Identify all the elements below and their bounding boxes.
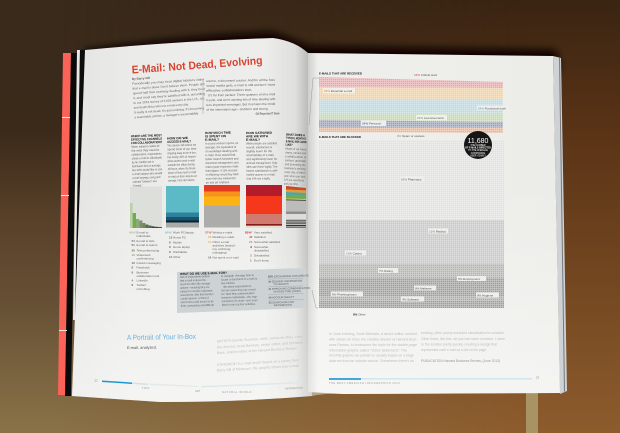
- band: personal: [319, 120, 503, 128]
- legend: satisfaction: 83%*: [245, 230, 253, 234]
- legend: time spent: Not spent on e-mail: [212, 255, 239, 259]
- column: satisfaction: 38% rate these highly. The: [246, 165, 278, 169]
- credits: [217, 335, 304, 372]
- legend: satisfaction: 4: [250, 245, 252, 249]
- intro text, column 1: and South Africa who use e-mail every day.: [134, 102, 189, 110]
- band: replica and casino: [319, 220, 504, 264]
- legend: access device: Mobile: [173, 240, 182, 244]
- column: monthly mix: and, when you look: [284, 174, 306, 179]
- legend: time spent: Reading e-mails: [212, 235, 235, 239]
- bracket lines: [309, 78, 319, 308]
- column: monthly mix: 22% are superfluous: [284, 178, 305, 183]
- column: time spent on e-mail: e-mail. How would that: [205, 153, 236, 157]
- column: effective channels: the most they used for: [131, 148, 160, 153]
- legend: collaboration channels: 69%*: [129, 230, 137, 234]
- column: monthly mix: every day, of which: [284, 170, 306, 175]
- column: monthly mix: business's sending: [284, 166, 306, 171]
- callout text, column 1: time consuming and difficult: [181, 303, 214, 308]
- legend: satisfaction: 1: [250, 258, 252, 262]
- legend: satisfaction: 43: [249, 235, 253, 239]
- left page footer bar: 22: [94, 378, 98, 382]
- legend: access device: 8: [169, 250, 171, 254]
- legend: access device: Home laptop: [173, 245, 190, 249]
- intro text, column 2: social media gets, e-mail is still workers' most: [206, 83, 275, 88]
- callout circle: 11,680: USER YEARLY: [470, 154, 486, 157]
- column: satisfaction: mobile access to e-mail.: [246, 172, 276, 177]
- intro text, column 1: it, and most say they're satisfied with it, according: [133, 92, 205, 100]
- intro text, column 2: It's far from perfect: Three-quarters of all e-mail: [208, 92, 276, 97]
- legend: access device: 8: [169, 245, 171, 249]
- article text, column 1: ness Review, to brainstorm the topic for the double-page: [329, 343, 417, 347]
- callout text, column 1: using it to archive important: [180, 288, 213, 293]
- column: how we access e-mail: outside the office during: [168, 162, 195, 167]
- legend: collaboration channels: Video/web: [136, 253, 151, 257]
- callout text, column 2: listed in the top four activities.: [222, 302, 256, 307]
- legend: time spent: [205, 230, 239, 259]
- legend: collaboration channels: LinkedIn: [136, 278, 148, 282]
- callout text, column 2: [221, 273, 258, 307]
- callout circle: 11,680: 11,680: [468, 138, 489, 145]
- legend: time spent: 14: [208, 255, 212, 259]
- blocked labels: 8% Hygiene: [477, 293, 494, 297]
- column: how we access e-mail: ACCESS E-MAIL?: [167, 139, 191, 144]
- legend: collaboration channels: individuals: [136, 234, 151, 238]
- column: satisfaction: archival management. Only: [246, 161, 278, 165]
- column: time spent on e-mail: more than two workweeks: [206, 176, 236, 181]
- legend: time spent: ing, archiving,: [212, 247, 231, 251]
- column: effective channels: by far. Mobile use is: [132, 160, 154, 164]
- article text, column 2: represented each e-mail as a dot on the page.: [421, 348, 487, 352]
- article text, column 2: PUBLICATION Harvard Business Review, (June 2013): [421, 359, 500, 363]
- column: how we access e-mail: The device still where we: [167, 143, 197, 147]
- column: time spent on e-mail: average, the equivalent of: [205, 145, 236, 149]
- received labels: 28% Essential e-mail: [324, 89, 352, 93]
- callout text, column 1: need for other file storage: [180, 281, 211, 286]
- legend: collaboration channels: Business: [136, 270, 149, 274]
- column: monthly mix: WHAT DOES A: [286, 133, 306, 137]
- column: effective channels: e-mail subject who would: [132, 171, 163, 176]
- legend: satisfaction: Very satisfied: [254, 230, 272, 234]
- blocked labels: [331, 176, 499, 316]
- callout text, column 2: between individuals—the origi-: [222, 295, 258, 300]
- received labels: 16% Personal: [362, 122, 381, 126]
- callout list of uses: 41 IMPROVING COMMUNICATION: [268, 286, 310, 291]
- column: time spent on e-mail: macro good responses make: [206, 164, 239, 169]
- callout circle: 11,680: [464, 131, 492, 159]
- right page: [308, 53, 560, 394]
- column: time spent on e-mail: E-MAIL?: [205, 138, 219, 142]
- column: effective channels: but 30% would like to use: [132, 167, 163, 172]
- credits: Barry Gill of Mimecast, this graphic shows how e-mail: [217, 364, 299, 372]
- column: satisfaction: E-MAIL?: [246, 138, 260, 142]
- intro text, column 2: source, a document courier. And for all the fuss: [206, 78, 276, 83]
- callout text, column 2: for. Note that communication: [221, 291, 255, 296]
- dot chart: blocked e-mails: [319, 140, 504, 308]
- legend: collaboration channels: 8: [132, 270, 134, 274]
- column: effective channels: WHICH ARE THE MOST: [131, 133, 162, 138]
- legend: collaboration channels: 51: [132, 243, 135, 247]
- callout text, column 1: documents. Still, this function: [180, 292, 214, 297]
- callout list of uses: 33 SEARCHING FOR: [269, 300, 294, 304]
- column: monthly mix: [284, 133, 308, 186]
- credits: Borie, articles editor, at the Harvard Business Review: [217, 346, 297, 355]
- blocked labels: 7% Dating: [379, 269, 393, 273]
- intro text, column 1: to our 2013 survey of 2,602 workers in the U.S., UK,: [133, 96, 206, 105]
- page shadow: [84, 32, 560, 70]
- credits: ARTISTS Bonnie Scranton, artist; James de Vries, crea-: [217, 335, 304, 343]
- column: satisfaction: While people are satisfied: [246, 141, 277, 145]
- article text, column 1: with James de Vries, the creative director at Harvard Busi-: [329, 338, 417, 342]
- legend: satisfaction: Somewhat: [254, 245, 268, 249]
- left page: [72, 38, 312, 402]
- column: how we access e-mail: dents access work e-mail: [168, 158, 195, 163]
- column: effective channels: selected "followers" and: [132, 179, 157, 184]
- credits: tive director; Scott Berinato, senior editor; and Christine: [217, 341, 303, 349]
- callout text, column 2: two minutes.: [221, 281, 235, 285]
- legend: satisfaction: 23: [249, 240, 253, 244]
- legend: satisfaction: [245, 230, 280, 262]
- legend: time spent: 15: [208, 240, 212, 244]
- callout text, column 2: list use cases they use e-mail: [221, 287, 256, 292]
- callout list of uses: TO GROUPS: [273, 282, 289, 286]
- section title: a portrait of your in-box: A Portrait of Your In-Box: [127, 332, 196, 342]
- intro text, column 1: By Barry Gill: [132, 76, 150, 81]
- left page footer bar: TWO: [142, 386, 150, 390]
- legend: collaboration channels: collaboration tool: [136, 274, 160, 278]
- intro text, column 1: [132, 72, 207, 119]
- blocked labels: 63% Pharmacy: [401, 177, 422, 181]
- legend: access device: Home PC: [173, 236, 187, 240]
- band: low-level work: [319, 114, 503, 122]
- blocked labels: 13% Replica: [429, 229, 446, 233]
- legend: time spent: 15: [208, 235, 212, 239]
- callout text, column 1: could improve: a third of: [181, 296, 209, 301]
- legend: time spent: managing): [212, 251, 227, 255]
- column: time spent on e-mail: that happen. A 10% increase: [206, 168, 238, 173]
- article text, column 2: Other times, like this, we just had some numbers. I came: [421, 337, 505, 341]
- band: spam or useless: [319, 128, 503, 133]
- intro text, column 1: that e-mail is dead. Don't believe them. People still: [132, 82, 205, 91]
- book cover edge strips: [58, 50, 85, 396]
- column: effective channels: FOR COLLABORATION?: [131, 140, 162, 145]
- title: E-Mail: Not Dead, Evolving: [131, 55, 263, 76]
- column: how we access e-mail: off-hours, where the break-: [168, 166, 196, 171]
- intro text, column 1: spend half their workday dealing with it, they trust: [133, 87, 205, 95]
- column: satisfaction: overall, satisfaction is: [246, 145, 273, 149]
- column: effective channels: collaboration, respondents: [132, 152, 162, 157]
- column: time spent on e-mail: document management, and: [205, 160, 239, 165]
- column: time spent on e-mail: [205, 130, 239, 184]
- chart: satisfaction stack: [246, 185, 282, 228]
- callout text, column 2: locate a document in e-mail is: [221, 277, 258, 282]
- intro text, column 2: of the information age—stubborn and strong.: [206, 107, 269, 112]
- column: effective channels: chose e-mail to individuals: [132, 155, 162, 160]
- column: how we access e-mail: spend most of our time: [167, 147, 197, 151]
- column: effective channels: e-mail anyway, using and: [132, 175, 161, 180]
- legend: collaboration channels: Facebook: [136, 266, 150, 270]
- page stack at right edge: [553, 56, 567, 394]
- column: monthly mix: and just 30%: [284, 182, 298, 186]
- legend: collaboration channels: Teleconferencing: [136, 248, 160, 252]
- callout circle: 11,680: OF E-MAILS DIRECTED: [465, 147, 491, 150]
- legend: access device: [165, 230, 194, 259]
- callout text, column 1: Half of respondents believe: [180, 274, 210, 279]
- received labels: 18% Critical work: [414, 73, 438, 77]
- legend: satisfaction: 3: [250, 254, 252, 258]
- right page footer bar: 23: [536, 376, 540, 380]
- column: time spent on e-mail: IS SPENT ON: [205, 134, 227, 138]
- legend: satisfaction: Dissatisfied: [254, 254, 270, 258]
- callout circle: 11,680: CORPORATE: [471, 152, 486, 155]
- legend: collaboration channels: 30: [132, 248, 135, 252]
- legend: time spent: activities (search-: [212, 243, 236, 247]
- callout list of uses: 40 ACCOUNTABILITY: [268, 295, 295, 299]
- legend: satisfaction: Satisfied: [254, 235, 266, 239]
- legend: time spent: Writing e-mails: [212, 230, 233, 234]
- legend: collaboration channels: E-mail to: [136, 230, 149, 234]
- heading: e-mails that are received: E-MAILS THAT ARE RECEIVED: [319, 72, 363, 76]
- callout text, column 2: nal intent of e-mail—isn't even: [222, 298, 258, 303]
- band: dating, employment and malware: [319, 264, 504, 278]
- legend: collaboration channels: 13: [132, 253, 135, 257]
- column: satisfaction: HOW SATISFIED: [246, 131, 273, 135]
- legend: collaboration channels: 8: [132, 266, 134, 270]
- callout text, column 2: We asked respondents to: [223, 284, 252, 289]
- column: how we access e-mail: chipping away at the in-box,: [167, 150, 197, 155]
- blocked labels: 11% Casino: [346, 251, 362, 255]
- left page footer bar: INFORMATION: [285, 386, 303, 390]
- column: satisfaction: [246, 131, 278, 181]
- intro text, column 2: [206, 78, 280, 117]
- left page footer bar: NATURAL WORLD: [222, 390, 252, 394]
- column: monthly mix: E-MAIL MIX LOOK: [286, 139, 307, 144]
- right page footer bar: [329, 376, 540, 385]
- legend: access device: Work PC/laptop: [173, 230, 194, 234]
- intro text, column 2: Gill Reported IT Desk: [256, 111, 280, 116]
- column: effective channels: EFFECTIVE CHANNELS: [131, 137, 162, 142]
- right page footer bar: THE BEST AMERICAN INFOGRAPHICS 2014: [329, 382, 400, 385]
- legend: collaboration channels: 4: [132, 278, 134, 282]
- section subtitle: E-mail, analyzed.: [127, 345, 157, 350]
- column: effective channels: "friends.": [133, 183, 143, 188]
- callout circle: 11,680: TO THE AVERAGE: [468, 149, 488, 152]
- column: time spent on e-mail: per year per employee.: [206, 180, 230, 184]
- chart: monthly mix stack: [286, 186, 306, 228]
- chart: collaboration channels bars: [130, 186, 162, 228]
- received labels: 24% Functional work: [478, 106, 506, 110]
- chart: time spent stack: [204, 185, 240, 228]
- column: effective channels: [131, 133, 164, 188]
- legend: access device: 60%*: [165, 230, 173, 234]
- column: how we access e-mail: [167, 136, 198, 183]
- callout text, column 1: [180, 274, 214, 308]
- column: monthly mix: content, generally: [285, 158, 306, 163]
- legend: time spent: 57%*: [205, 230, 213, 234]
- column: time spent on e-mail: In a year workers spend, on: [205, 141, 239, 145]
- column: how we access e-mail: is read on their access on: [168, 174, 197, 179]
- blocked labels: 6% Employment: [458, 277, 480, 281]
- legend: access device: iPad/tablet: [173, 250, 187, 254]
- band: functional work: [319, 100, 503, 114]
- column: effective channels: distribution lists on average,: [132, 163, 161, 168]
- article text, column 1: [329, 332, 417, 363]
- legend: collaboration channels: Instant messaging: [136, 261, 161, 265]
- callout list of uses: 56% EXCHANGING DOCUMENTS: [268, 273, 309, 278]
- callout list of uses: [268, 273, 310, 307]
- band: essential e-mail: [319, 87, 503, 100]
- article text, column 1: information graphic called "Vision Statement." The: [329, 348, 407, 352]
- intro text, column 2: effective collaboration tool.: [206, 88, 252, 93]
- received labels: 10% Low-level work: [417, 116, 444, 120]
- callout: what do we use e-mail for: [177, 268, 310, 313]
- column: monthly mix: many, varied and: [285, 150, 307, 155]
- column: monthly mix: a small portion of: [285, 154, 306, 159]
- legend: time spent: Other e-mail: [212, 240, 229, 244]
- column: satisfaction: searchability of e-mail,: [246, 153, 274, 157]
- intro text, column 1: It really is not dead; it's just evolving. It's becoming: [134, 106, 204, 115]
- callout text, column 2: to navigate. Average time to: [221, 273, 254, 278]
- legend: collaboration channels: 54: [132, 239, 135, 243]
- blocked labels: 8% Phishing/scam: [332, 292, 357, 296]
- legend: access device: 13: [169, 236, 173, 240]
- chart: access device stack: [166, 186, 199, 228]
- column: satisfaction: lowest satisfaction is with: [246, 169, 278, 173]
- legend: collaboration channels: microblog: [136, 287, 150, 291]
- callout text, column 1: users find e-mail search to be: [181, 299, 214, 304]
- received labels: [323, 72, 509, 138]
- intro text, column 1: a searchable archive, a manager's accountability: [134, 111, 199, 119]
- legend: collaboration channels: E-mail to lists: [136, 239, 155, 243]
- legend: access device: 11: [169, 255, 173, 259]
- column: monthly mix: LIKE?: [286, 143, 293, 147]
- blocked labels: 8% Malware: [415, 286, 432, 290]
- intro text, column 1: Periodically you may hear digital hipsters claim: [132, 77, 205, 86]
- column: how we access e-mail: HOW DO WE: [167, 136, 188, 140]
- left page footer bar: ART: [195, 389, 201, 393]
- band: phishing, software, hygiene: [319, 278, 504, 308]
- legend: collaboration channels: [129, 230, 161, 291]
- callout list of uses: INFORMATION: [274, 303, 292, 307]
- article text, column 1: monthly graphic we publish is usually based on a large: [329, 354, 414, 358]
- blocked labels: 8% Other: [353, 312, 366, 316]
- column: how we access e-mail: average, from each device.: [168, 178, 195, 183]
- column: monthly mix: and promoting the: [285, 162, 306, 167]
- legend: collaboration channels: 10: [132, 261, 135, 265]
- intro text, column 2: is junk, and we're wasting lots of time dealing with: [206, 97, 276, 102]
- column: how we access e-mail: down of how much e-mail: [168, 170, 196, 175]
- column: satisfaction: slightly lower for the: [246, 149, 273, 153]
- dot chart: received e-mails: [319, 77, 503, 133]
- column: monthly mix: Most of us have: [285, 146, 307, 151]
- article text, column 2: existing, often poorly executed visualization to consider.: [421, 331, 505, 335]
- band: critical work: [319, 77, 503, 88]
- article text, column 1: data set from an outside source. Sometimes there's an: [329, 359, 414, 363]
- callout heading: WHAT DO WE USE E-MAIL FOR?: [180, 271, 227, 276]
- legend: collaboration channels: 8: [132, 283, 134, 287]
- column: satisfaction: and significantly lower for: [246, 157, 277, 161]
- credits: STATEMENT Is e-mail dead? Based on a survey from: [217, 358, 299, 367]
- blocked labels: 4% Software: [402, 297, 419, 301]
- column: time spent on e-mail: HOW MUCH TIME: [205, 131, 231, 135]
- column: monthly mix: TYPICAL MONTH'S: [286, 136, 306, 141]
- column: time spent on e-mail: on workdays dealing with: [205, 149, 238, 153]
- legend: collaboration channels: conferencing: [136, 256, 154, 260]
- received labels: 9% Spam or useless: [397, 134, 425, 138]
- legend: satisfaction: Somewhat satisfied: [254, 240, 280, 244]
- legend: satisfaction: Don't know: [254, 258, 270, 262]
- article text, column 1: In June evening, Scott Berinato, a senior editor, worked: [329, 332, 417, 336]
- legend: satisfaction: dissatisfied: [254, 248, 269, 252]
- callout text, column 1: that e-mail reduces the: [180, 278, 207, 283]
- article text, column 2: [421, 331, 505, 363]
- column: satisfaction: Only 24% rate it highly.: [246, 176, 271, 181]
- legend: access device: Other: [173, 255, 181, 259]
- column: satisfaction: ARE WE WITH: [246, 134, 269, 138]
- left page footer bar: [94, 378, 303, 394]
- column: effective channels: When asked to select all: [131, 144, 160, 149]
- callout list of uses: 44 SENDING INFORMATION: [268, 279, 302, 283]
- callout list of uses: ACROSS TIME ZONES: [273, 289, 301, 294]
- heading: e-mails that are blocked: E-MAILS THAT ARE BLOCKED: [319, 135, 362, 139]
- column: time spent on e-mail: in efficiency would buy back: [206, 172, 239, 177]
- callout text, column 1: options—meaning they are: [180, 285, 210, 290]
- legend: collaboration channels: E-mail to teams: [136, 243, 158, 247]
- legend: access device: 8: [169, 240, 171, 244]
- column: how we access e-mail: but nearly 40% of respon-: [167, 154, 197, 159]
- column: time spent on e-mail: better search functions and: [205, 157, 239, 161]
- intro text, column 2: less important messages. But it remains the mode: [206, 102, 276, 107]
- legend: collaboration channels: Twitter/: [136, 283, 146, 287]
- callout circle: 11,680: THE NUMBER: [470, 145, 486, 147]
- band: pharmacy: [319, 140, 504, 220]
- article text, column 2: to the solution pretty quickly, creating a design that: [421, 342, 497, 346]
